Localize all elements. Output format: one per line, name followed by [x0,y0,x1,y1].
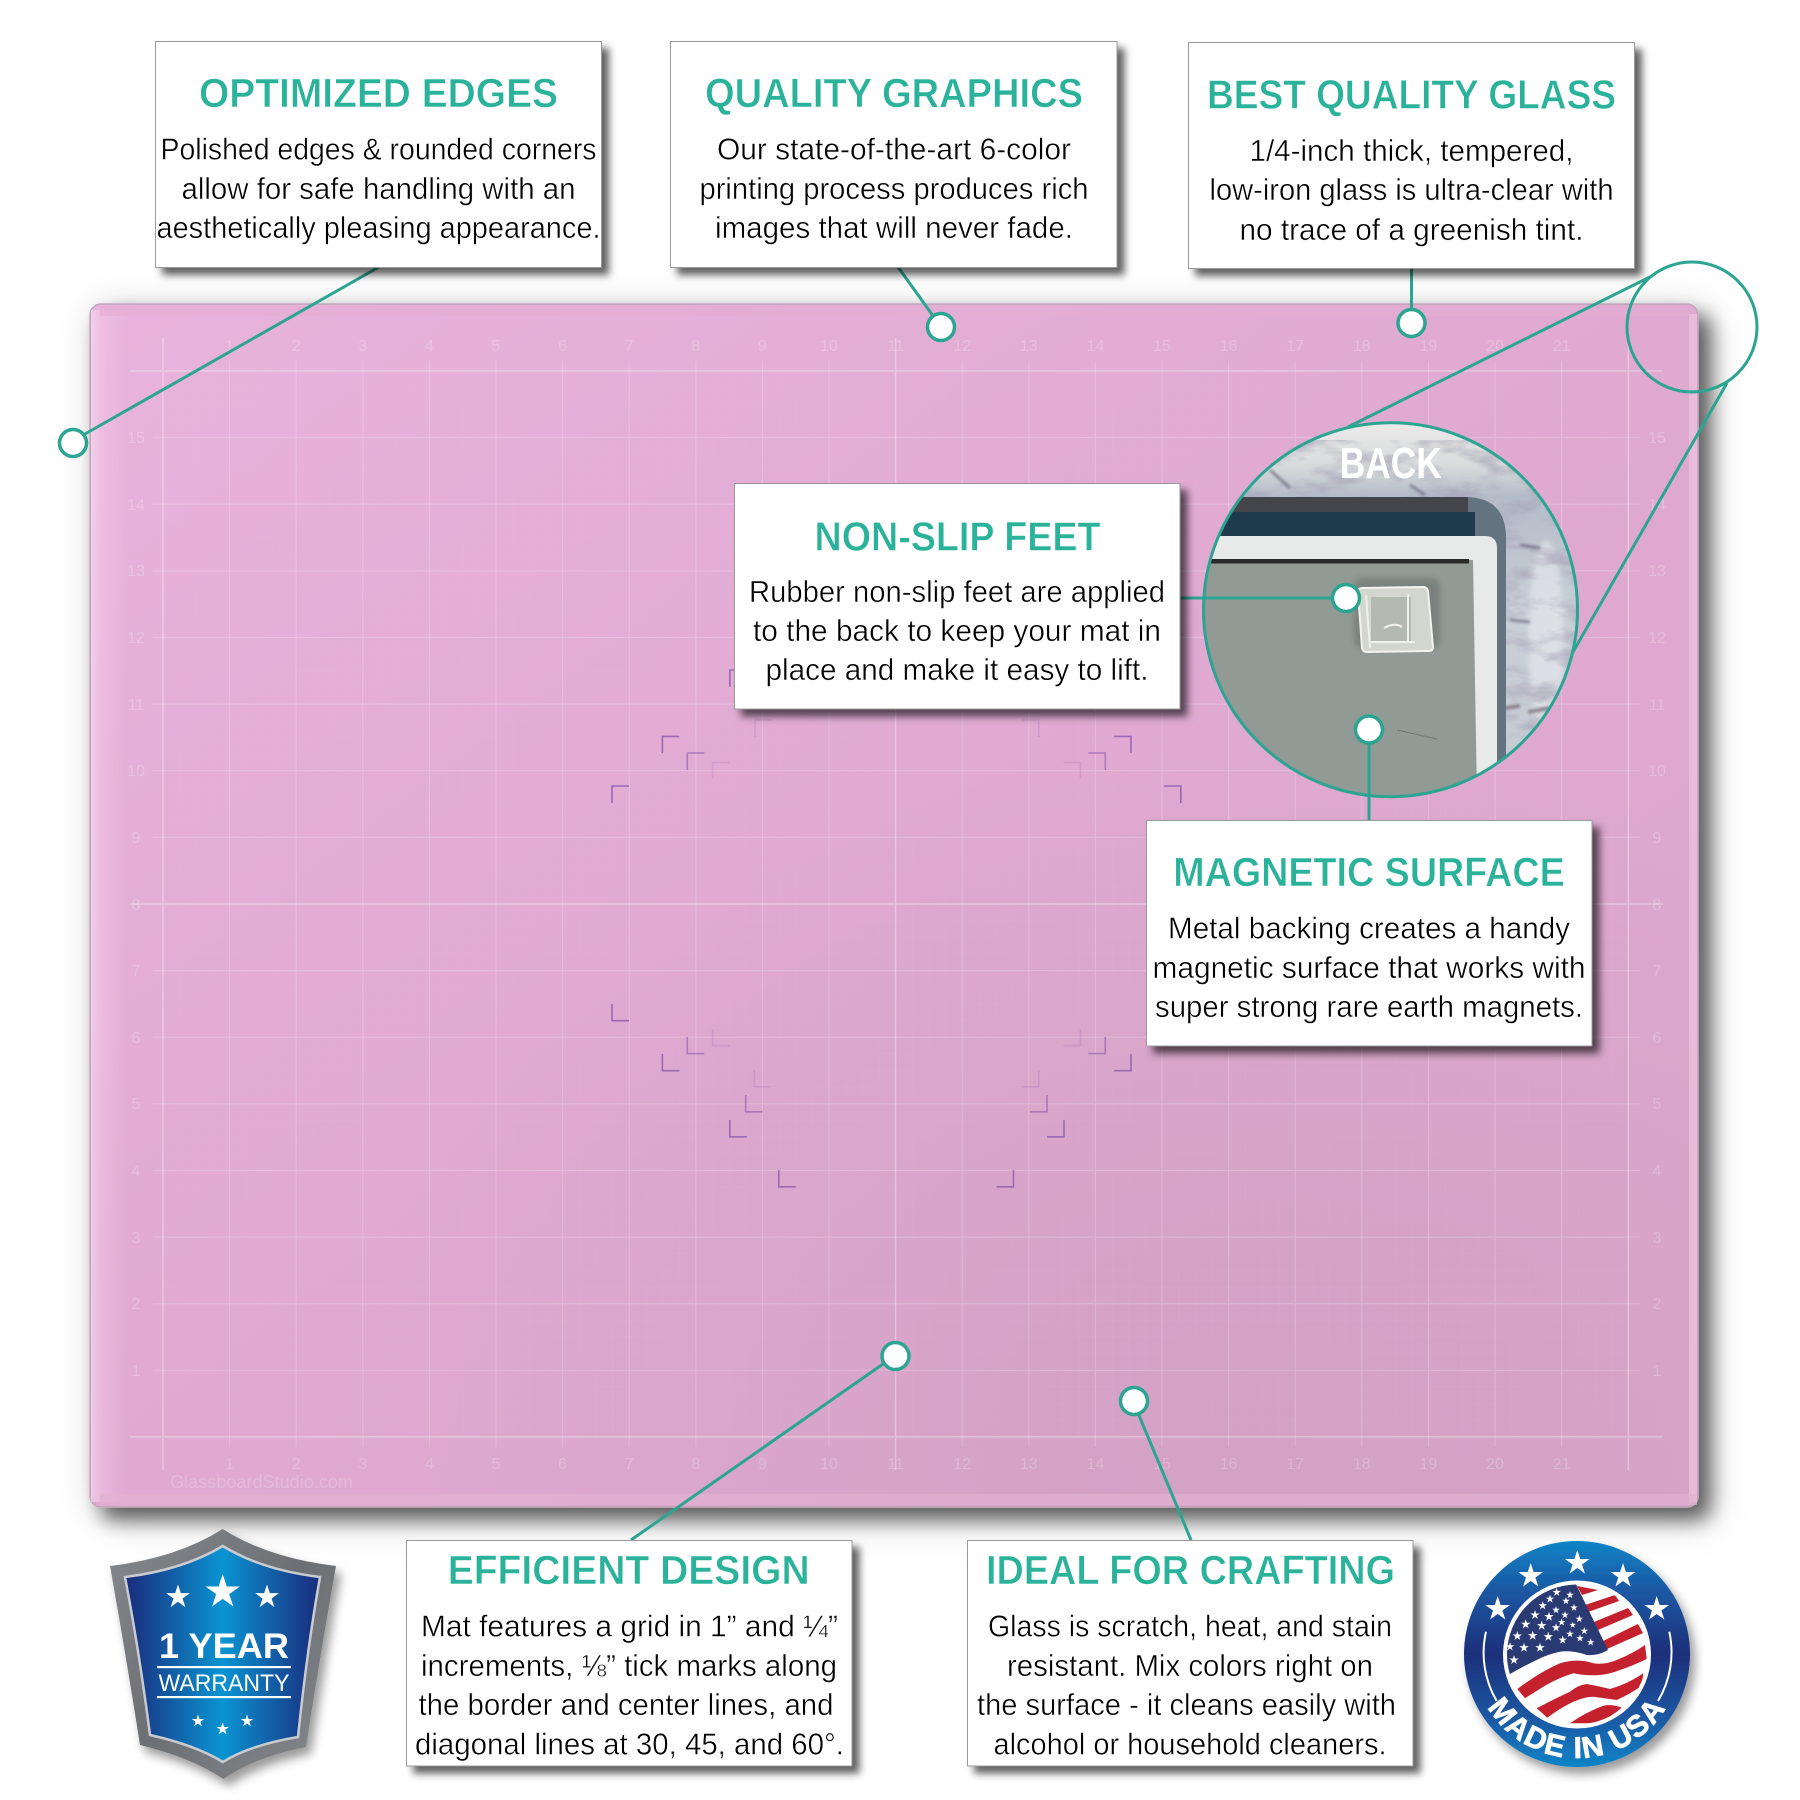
top ruler numbers: 21 [1553,338,1571,355]
right ruler numbers: 6 [1653,1030,1662,1047]
arrow: quality graphics leader [898,267,954,340]
top ruler numbers: 11 [887,338,904,355]
border and center lines [130,338,1663,1470]
left ruler numbers: 12 [127,630,145,647]
panel: quality graphics [670,42,1117,268]
bottom ruler numbers: 15 [1153,1456,1171,1473]
left ruler numbers: 6 [132,1030,141,1047]
body text: Our state-of-the-art 6-color [717,132,1071,166]
made in USA text: MADE IN USA [1488,1696,1666,1758]
left ruler numbers: 7 [132,963,141,980]
icon: made in USA badge [1462,1541,1702,1780]
right ruler numbers: 15 [1648,430,1666,447]
top ruler numbers: 16 [1220,338,1238,355]
left ruler numbers: 5 [132,1096,141,1113]
heading: EFFICIENT DESIGN [448,1547,810,1593]
body text: to the back to keep your mat in [753,613,1161,648]
bottom ruler numbers: 6 [558,1456,567,1473]
right ruler numbers: 11 [1649,697,1665,714]
body text [415,1609,844,1762]
body text [749,574,1165,687]
body text: resistant. Mix colors right on [1007,1648,1373,1683]
arrow: efficient design leader [631,1342,909,1540]
top ruler numbers: 3 [358,338,367,355]
right ruler numbers: 3 [1653,1230,1662,1247]
right ruler numbers: 9 [1653,830,1662,847]
top ruler numbers: 18 [1353,338,1371,355]
left ruler numbers: 10 [127,763,145,780]
body text [700,132,1088,245]
body text: the border and center lines, and [418,1687,834,1722]
bottom ruler numbers: 4 [425,1456,434,1473]
right ruler numbers: 7 [1653,963,1662,980]
top ruler numbers: 7 [625,338,634,355]
bottom ruler numbers: 19 [1420,1456,1437,1473]
bottom ruler numbers: 21 [1553,1456,1571,1473]
body text: 1/4-inch thick, tempered, [1250,133,1574,168]
panel: non-slip feet [734,484,1180,709]
right ruler numbers: 13 [1648,563,1666,580]
top ruler numbers: 1 [225,338,234,355]
right ruler numbers: 8 [1653,897,1662,914]
panel: glass cutting mat board [90,304,1698,1507]
bottom ruler numbers: 18 [1353,1456,1371,1473]
heading: MAGNETIC SURFACE [1173,849,1565,895]
heading: QUALITY GRAPHICS [705,70,1083,116]
arrow: magnetic surface leader [1356,716,1382,821]
left ruler numbers: 1 [132,1363,141,1380]
panel: efficient design [406,1540,852,1766]
American flag [1507,1584,1647,1724]
bottom ruler numbers: 7 [625,1456,634,1473]
body text [977,1609,1396,1762]
bottom ruler numbers: 16 [1220,1456,1238,1473]
body text: place and make it easy to lift. [766,652,1148,687]
panel: optimized edges [156,42,602,268]
top ruler numbers: 14 [1087,338,1104,355]
arrow: optimized edges leader [60,267,379,456]
body text: Polished edges & rounded corners [160,132,596,166]
body text: alcohol or household cleaners. [994,1727,1386,1762]
arrow: ideal for crafting leader [1120,1388,1191,1540]
top ruler numbers: 20 [1486,338,1504,355]
bottom ruler numbers: 12 [953,1456,971,1473]
body text: magnetic surface that works with [1152,950,1586,985]
bottom ruler numbers: 1 [225,1456,234,1473]
back label: BACK [1340,439,1442,488]
metal backing [1190,560,1477,800]
top ruler numbers: 10 [820,338,838,355]
panel: back-of-mat magnified photo [1190,420,1580,800]
right ruler numbers: 12 [1648,630,1666,647]
bottom ruler numbers: 10 [820,1456,838,1473]
icon: 1 year warranty shield: WARRANTY [158,1670,290,1697]
right ruler numbers: 2 [1653,1296,1662,1313]
body text: allow for safe handling with an [182,171,576,206]
top ruler numbers: 13 [1020,338,1038,355]
body text: increments, ⅛” tick marks along [421,1648,837,1683]
bottom ruler numbers: 14 [1087,1456,1104,1473]
left ruler numbers: 13 [127,563,145,580]
body text [1152,910,1586,1024]
left ruler numbers: 4 [132,1163,141,1180]
body text: images that will never fade. [715,210,1073,245]
top ruler numbers: 8 [691,338,700,355]
inner grid lines [153,361,1640,1447]
panel: ideal for crafting [968,1540,1413,1766]
glass edge [1468,497,1506,762]
right ruler numbers: 14 [1648,497,1666,514]
top ruler numbers: 5 [492,338,501,355]
heading: BEST QUALITY GLASS [1207,72,1616,118]
top ruler numbers [225,338,1571,355]
bottom ruler numbers: 5 [492,1456,501,1473]
bottom ruler numbers: 20 [1486,1456,1504,1473]
left ruler numbers: 2 [132,1296,141,1313]
bottom ruler numbers: 3 [358,1456,367,1473]
bottom ruler numbers: 2 [292,1456,301,1473]
body text: low-iron glass is ultra-clear with [1210,172,1614,207]
warranty text: 1 YEAR [159,1627,289,1666]
white frame [1212,536,1497,774]
top ruler numbers: 4 [425,338,434,355]
right ruler numbers: 1 [1653,1363,1662,1380]
top ruler numbers: 19 [1420,338,1437,355]
body text: diagonal lines at 30, 45, and 60°. [415,1727,844,1762]
left ruler numbers: 14 [127,497,145,514]
top ruler numbers: 15 [1153,338,1171,355]
bottom ruler numbers: 11 [887,1456,904,1473]
body text: super strong rare earth magnets. [1155,989,1583,1024]
right ruler numbers: 10 [1648,763,1666,780]
top ruler numbers: 6 [558,338,567,355]
left ruler numbers: 8 [132,897,141,914]
diagonal crop marks [612,670,1181,1187]
body text [1210,133,1614,247]
body text [156,132,600,245]
right ruler numbers: 4 [1653,1163,1662,1180]
heading: NON-SLIP FEET [814,514,1100,560]
panel: best quality glass [1188,42,1634,268]
left ruler numbers: 9 [132,830,141,847]
body text: Mat features a grid in 1” and ¼” [421,1609,838,1644]
icon: rubber foot [1354,578,1440,652]
top ruler numbers: 12 [953,338,971,355]
body text: Rubber non-slip feet are applied [749,574,1165,609]
top ruler numbers: 17 [1286,338,1304,355]
bottom ruler numbers: 8 [691,1456,700,1473]
right ruler numbers: 5 [1653,1096,1662,1113]
top ruler numbers: 9 [758,338,767,355]
panel: magnetic surface [1146,820,1592,1046]
body text: printing process produces rich [700,171,1088,206]
bottom ruler numbers: 13 [1020,1456,1038,1473]
bottom ruler numbers: 9 [758,1456,767,1473]
heading: OPTIMIZED EDGES [199,70,558,116]
right ruler numbers [1648,430,1666,1380]
watermark: GlassboardStudio.com [170,1472,353,1492]
body text: no trace of a greenish tint. [1240,212,1584,247]
left ruler numbers: 11 [128,697,144,714]
arrow: non-slip feet leader [1180,584,1360,612]
left ruler numbers [127,430,145,1380]
heading: IDEAL FOR CRAFTING [986,1547,1395,1593]
bottom ruler numbers [225,1456,1571,1473]
icon: 1 year warranty shield [110,1529,336,1779]
body text: Metal backing creates a handy [1168,910,1570,946]
left ruler numbers: 15 [127,430,145,447]
bottom ruler numbers: 17 [1286,1456,1304,1473]
left ruler numbers: 3 [132,1230,141,1247]
top ruler numbers: 2 [292,338,301,355]
arrow: magnifier connector from corner to back view [1348,262,1757,652]
arrow: best quality glass leader [1398,268,1425,336]
body text: aesthetically pleasing appearance. [156,210,600,245]
body text: the surface - it cleans easily with [977,1687,1396,1722]
body text: Glass is scratch, heat, and stain [988,1609,1392,1644]
